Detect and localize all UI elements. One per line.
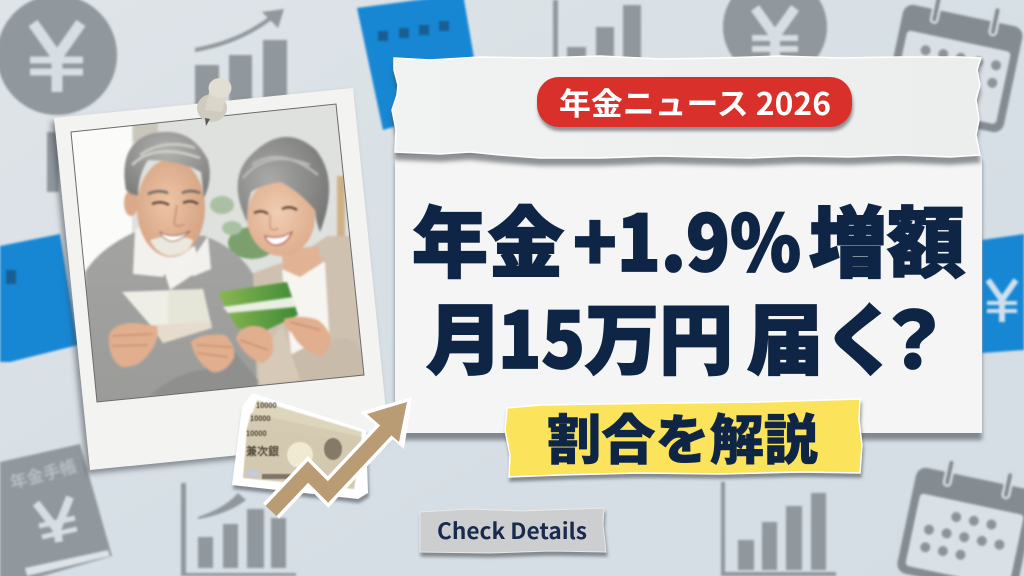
icon: calendar top right	[883, 0, 1024, 134]
icon: grey shape behind photo	[47, 132, 59, 192]
heading: title	[412, 183, 965, 391]
icon: bar chart bottom centre	[721, 482, 836, 576]
tag: news pill: 年金ニュース 2026	[559, 79, 831, 124]
icon: rising chart top left	[195, 9, 287, 110]
heading: title: 万円	[585, 280, 733, 391]
icon: yen coin top left	[0, 0, 117, 115]
hands	[109, 317, 330, 372]
heading: title: 届く	[747, 280, 899, 391]
heading: title: +1.9%	[573, 183, 801, 294]
icon: blue card right	[982, 234, 1024, 353]
man	[85, 132, 262, 410]
icon: bar chart top centre	[553, 0, 641, 67]
icon: blue card top	[357, 0, 474, 130]
icon: yen banknotes	[232, 393, 368, 499]
plant	[210, 196, 276, 259]
icon: yen banknotes: 兼次銀	[246, 443, 279, 459]
icon: yen banknotes: 10000	[256, 401, 277, 411]
icon: push pin	[197, 78, 232, 126]
panel: torn header paper	[392, 56, 981, 158]
icon: blue card left	[0, 234, 78, 362]
button: check details: Check Details	[437, 514, 587, 546]
heading: title: 年金	[412, 183, 564, 294]
button: check details	[420, 508, 606, 553]
icon: calendar bottom right	[896, 456, 1024, 576]
panel: polaroid photo	[50, 88, 389, 470]
photo wall and window	[132, 104, 349, 273]
icon: yen banknotes: 10000	[250, 414, 271, 424]
icon: pension book bottom left: 年金手帳	[7, 452, 79, 494]
icon: rising chart bottom left	[181, 483, 296, 576]
callout: yellow strip: 割合を解説	[547, 396, 818, 475]
arrow: rising tan arrow	[271, 397, 412, 511]
man sleeves and cardigan sleeves	[226, 354, 259, 386]
icon: yen banknotes: 10000	[246, 429, 267, 439]
photo: elderly couple	[85, 104, 364, 402]
icon: yen coin top centre	[723, 0, 827, 79]
white document	[122, 289, 212, 343]
panel: main paper	[395, 155, 982, 433]
woman	[238, 137, 366, 388]
heading: title: 月	[426, 280, 503, 391]
heading: title: ？	[875, 280, 952, 391]
green pension book	[218, 282, 298, 330]
icon: pension book bottom left	[0, 444, 112, 576]
heading: title: 15	[498, 280, 585, 391]
heading: title: 増額	[809, 183, 965, 294]
